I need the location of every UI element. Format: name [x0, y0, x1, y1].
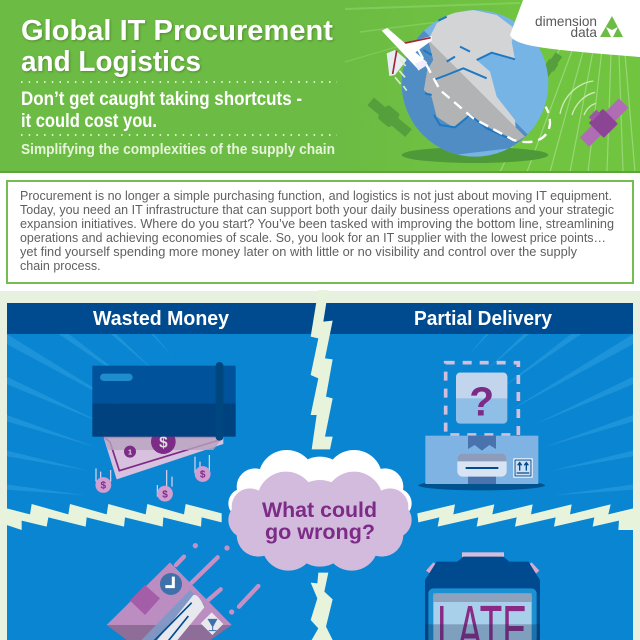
banknote: 1: [128, 447, 132, 456]
panel: intro text box: expansion initiatives. Where do you start? You’ve been tasked with improving the bottom line, streamlining: [20, 217, 614, 231]
icon: speeding package: [107, 543, 258, 640]
dotted divider top: [21, 81, 337, 83]
banknote: $: [159, 434, 168, 451]
panel: intro text box: chain process.: [20, 259, 101, 273]
icon: wallet with falling money: $: [101, 481, 107, 492]
falling coins: [96, 455, 210, 501]
title line 2: and Logistics: [21, 46, 201, 78]
wallet body: [92, 362, 236, 441]
plane: [382, 28, 432, 91]
cloud callout: [228, 450, 412, 571]
signal arcs: [560, 81, 596, 115]
icon: box with question mark: [418, 363, 545, 490]
lightning bolt: left: [0, 504, 222, 530]
subtitle line 1: Don’t get caught taking shortcuts -: [21, 89, 302, 110]
coast lines: [423, 17, 517, 142]
subtitle line 2: it could cost you.: [21, 111, 157, 132]
dashed flight path: [418, 50, 550, 142]
purple satellite: [574, 93, 631, 150]
panel: intro text box: Procurement is no longer a simple purchasing function, and logistics is not just about moving IT equipment.: [20, 189, 612, 203]
globe illustration: [365, 10, 631, 163]
icon: wallet with falling money: [92, 362, 236, 501]
land light: [424, 10, 517, 140]
globe dark half: [397, 30, 530, 157]
heading: partial delivery: Partial Delivery: [414, 308, 553, 330]
panel: intro text box: yet find yourself spending more money later on with little or no visibility and control over the supply: [20, 245, 578, 259]
lightning bolt: top: [311, 290, 333, 449]
green satellite silhouettes: [365, 52, 563, 140]
lightning bolt: bottom: [311, 573, 333, 640]
cloud text line 1: What could: [262, 498, 377, 522]
panel: intro text box: operations and achieving economies of scale. So, you look for an IT supplier with the lowest price points…: [20, 231, 606, 245]
tagline: Simplifying the complexities of the supply chain: [21, 142, 335, 158]
cloud white back: [228, 450, 412, 518]
banknote: [103, 429, 223, 479]
cloud text line 2: go wrong?: [265, 520, 375, 544]
icon: wallet with falling money: $: [162, 489, 168, 500]
logo: data: [571, 25, 597, 40]
land dark shade: [424, 40, 525, 142]
dotted divider bottom: [21, 134, 337, 136]
heading: wasted money: Wasted Money: [93, 308, 230, 330]
cloud purple front: [228, 472, 412, 571]
globe sphere: [402, 10, 548, 157]
panel: intro text box: [0, 173, 640, 291]
title: Global IT Procurement: [21, 15, 333, 47]
globe shadow: [402, 147, 548, 163]
panel: what could go wrong background: [0, 291, 640, 640]
logo: dimension: [535, 14, 597, 29]
icon: wallet with falling money: $: [200, 470, 206, 481]
icon: box with question mark: ?: [469, 378, 494, 424]
panel: green header: [0, 0, 640, 173]
icon: late stopwatch: [425, 552, 540, 640]
lightning bolt: right: [417, 504, 640, 530]
panel: intro text box: Today, you need an IT infrastructure that can support both your daily business operations and your strategic: [20, 203, 614, 217]
logo: [510, 0, 640, 57]
